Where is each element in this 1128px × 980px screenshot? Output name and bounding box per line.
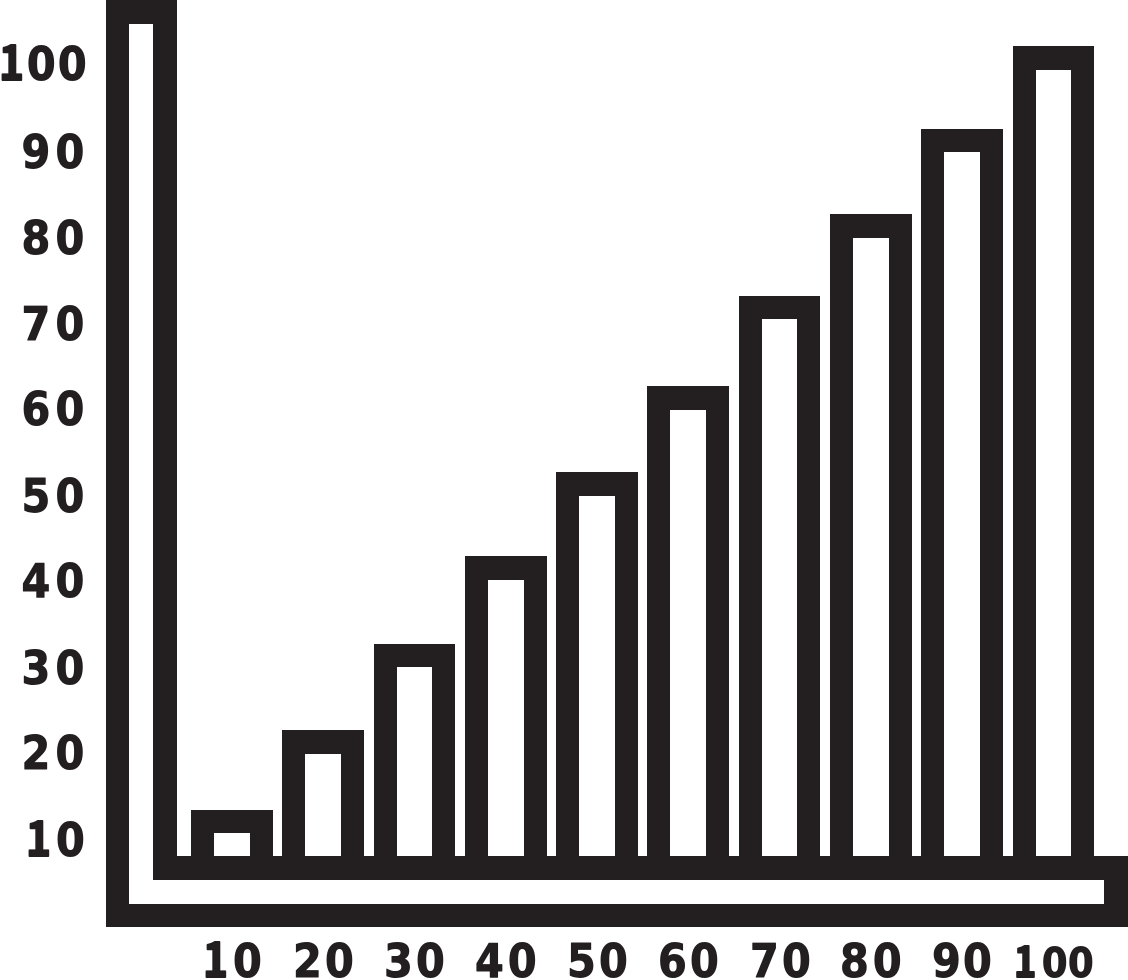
y axis labels [0, 25, 87, 870]
y axis labels: 20 [22, 727, 84, 781]
bar: 40 [465, 556, 547, 860]
y axis labels: 40 [22, 555, 84, 609]
bar: 10 [191, 810, 273, 860]
bars [191, 46, 1094, 860]
y axis labels: 1 [26, 801, 51, 870]
y axis labels: 60 [22, 383, 84, 437]
bar: 80 [830, 214, 912, 860]
y axis labels: 00 [27, 38, 87, 92]
bar: 60 [647, 386, 729, 860]
y axis labels: 0 [56, 814, 85, 868]
y axis labels: 90 [22, 126, 84, 180]
bar: 100 [1013, 46, 1094, 860]
bar: 70 [739, 296, 820, 860]
bar: 30 [374, 644, 455, 860]
bar: 50 [556, 472, 638, 860]
y axis labels: 50 [22, 470, 84, 524]
y axis labels: 80 [22, 212, 84, 266]
x axis labels [203, 922, 1094, 980]
bar: 20 [282, 730, 364, 860]
y axis labels: 30 [22, 642, 84, 696]
y axis labels: 70 [22, 298, 84, 352]
bar: 90 [921, 129, 1003, 860]
